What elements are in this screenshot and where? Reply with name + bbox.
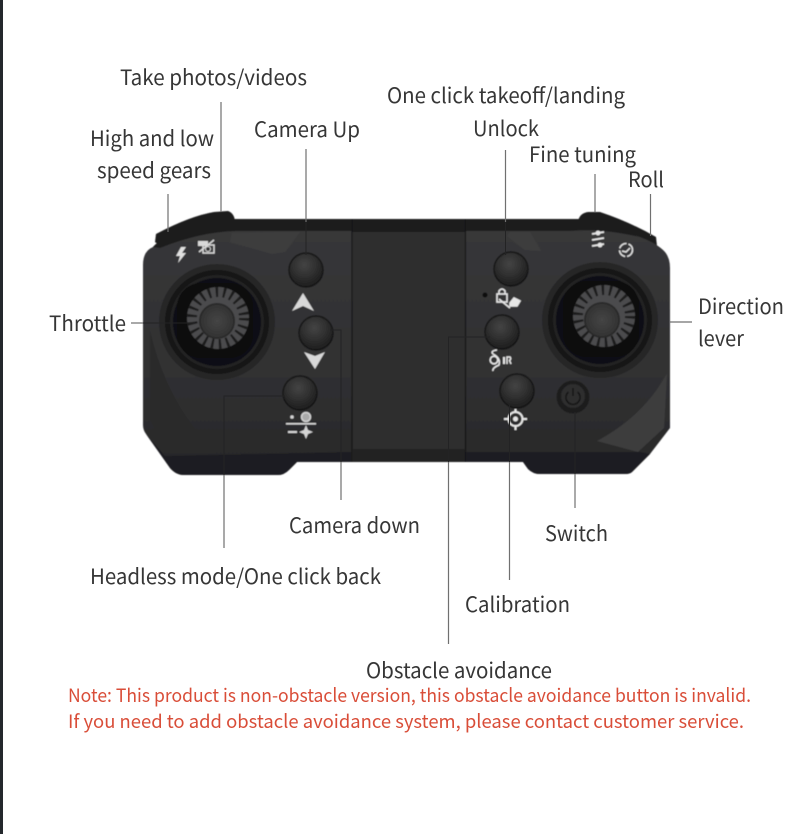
label: take photos: Take photos/videos bbox=[120, 62, 307, 92]
label: fine tuning: Fine tuning bbox=[529, 139, 636, 169]
body facets bbox=[146, 219, 667, 475]
icon: calibration target bbox=[504, 409, 527, 430]
right joystick bbox=[542, 262, 658, 378]
label: unlock: Unlock bbox=[473, 113, 539, 143]
label: roll: Roll bbox=[628, 164, 664, 194]
power switch bbox=[556, 380, 590, 414]
icon: camera down arrow bbox=[304, 352, 325, 369]
icon: roll bbox=[620, 244, 632, 256]
leader lines inside controller bbox=[143, 222, 575, 475]
label: throttle: Throttle bbox=[49, 308, 126, 338]
icon: takeoff and unlock bbox=[497, 289, 520, 308]
label: obstacle avoidance: Obstacle avoidance bbox=[366, 655, 552, 685]
note bbox=[68, 682, 751, 734]
label: calibration: Calibration bbox=[465, 589, 570, 619]
icon: obstacle avoidance IR bbox=[490, 350, 511, 371]
label: direction lever bbox=[698, 291, 784, 353]
label: headless mode: Headless mode/One click back bbox=[90, 561, 381, 591]
label: camera up: Camera Up bbox=[254, 114, 360, 144]
center phone clamp bbox=[352, 219, 466, 462]
label: speed gears: speed gears bbox=[97, 155, 211, 185]
shoulder buttons bbox=[155, 211, 657, 246]
buttons bbox=[283, 252, 534, 410]
label: direction lever: lever bbox=[698, 323, 745, 353]
label: speed gears: High and low bbox=[90, 123, 214, 153]
icon: camera up arrow bbox=[292, 293, 314, 311]
indicator light bbox=[482, 292, 488, 298]
icon: fine tuning bbox=[592, 232, 604, 246]
note: Note: This product is non-obstacle version, this obstacle avoidance button is invalid. bbox=[68, 682, 751, 708]
label: direction lever: Direction bbox=[698, 291, 784, 321]
controller bbox=[143, 211, 670, 475]
note: If you need to add obstacle avoidance system, please contact customer service. bbox=[68, 708, 744, 734]
leader lines bbox=[131, 102, 692, 644]
icon: photo and video bbox=[198, 240, 214, 253]
label: speed gears bbox=[90, 123, 214, 185]
left page edge strip bbox=[0, 0, 3, 834]
body shell bbox=[143, 219, 670, 475]
left joystick bbox=[159, 264, 275, 380]
label: camera down: Camera down bbox=[289, 510, 420, 540]
label: one click takeoff: One click takeoff/landing bbox=[387, 80, 625, 110]
label: switch: Switch bbox=[545, 518, 608, 548]
icon: headless and one click back bbox=[286, 412, 316, 439]
icon: speed flash bbox=[176, 247, 186, 263]
